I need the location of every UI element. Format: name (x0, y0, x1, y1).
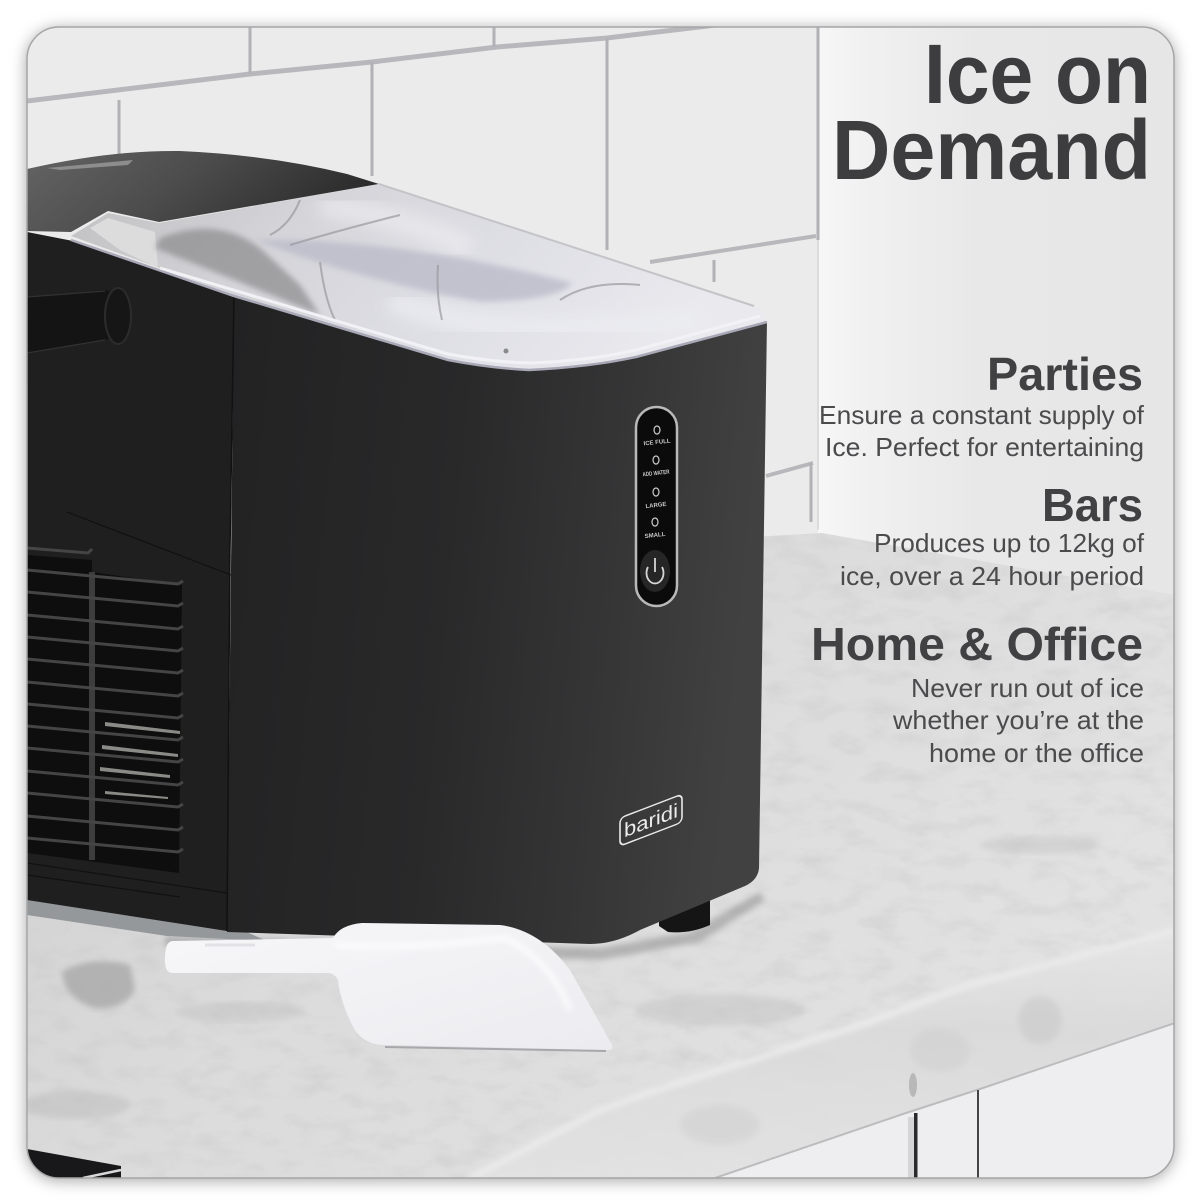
brand badge: baridi (624, 799, 678, 842)
power button (640, 550, 670, 592)
home and office body: whether you’re at the (892, 705, 1144, 735)
title: Ice on (924, 27, 1151, 121)
bars body: ice, over a 24 hour period (840, 561, 1144, 591)
home and office heading: Home & Office (811, 618, 1143, 670)
side vent grille (27, 548, 183, 873)
rear foot (659, 900, 710, 932)
machine side panel (27, 232, 234, 931)
feature: bars (840, 479, 1145, 591)
white ice scoop (165, 923, 612, 1051)
indicator: small: SMALL (645, 532, 666, 540)
counter front edge (538, 970, 1096, 1177)
feature: home and office (811, 618, 1144, 768)
home and office body: home or the office (929, 738, 1144, 768)
home and office body (892, 673, 1144, 768)
bars body (840, 528, 1145, 591)
indicator: ice full (643, 426, 671, 447)
machine front panel (227, 295, 767, 944)
tiled wall (27, 25, 1178, 647)
parties body: Ensure a constant supply of (819, 400, 1145, 430)
indicator: large (645, 488, 667, 510)
ice maker (27, 151, 767, 944)
indicator: add water: ADD WATER (642, 470, 670, 478)
home and office body: Never run out of ice (911, 673, 1144, 703)
bars body: Produces up to 12kg of (874, 528, 1145, 558)
clear ice lid (71, 184, 767, 370)
parties body (819, 400, 1145, 462)
indicator: large: LARGE (645, 502, 667, 510)
shadow under machine (165, 892, 765, 960)
bars heading: Bars (1042, 479, 1143, 531)
indicator: small (645, 518, 666, 540)
marble countertop (20, 533, 1175, 1178)
base silver strip (27, 899, 267, 941)
indicator: ice full: ICE FULL (643, 439, 671, 447)
control panel (636, 407, 677, 606)
indicator: add water (642, 456, 670, 478)
title: Demand (832, 103, 1151, 197)
feature: parties (819, 348, 1145, 462)
brand badge (620, 794, 682, 846)
cover label strip (47, 160, 133, 170)
top cover (27, 151, 379, 232)
parties heading: Parties (987, 348, 1143, 400)
bottom-left appliance corner (27, 1149, 121, 1178)
parties body: Ice. Perfect for entertaining (825, 432, 1144, 462)
title (832, 27, 1151, 197)
white cabinet doors (715, 1023, 1175, 1179)
side handle (27, 288, 131, 353)
